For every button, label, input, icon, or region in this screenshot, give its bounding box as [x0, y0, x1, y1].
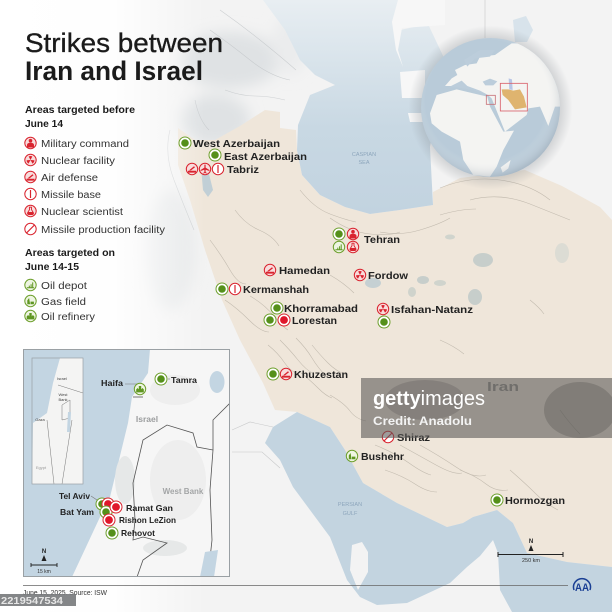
marker: Hamedan [264, 264, 330, 277]
legend item: military command: Military command [41, 139, 129, 150]
mini locator map [32, 358, 83, 484]
sea label: Caspian Sea [352, 152, 376, 166]
sea label: Caspian Sea: SEA [358, 160, 370, 166]
title: Strikes between [25, 28, 223, 58]
Iran highlight [502, 89, 527, 109]
legend item: oil depot: Oil depot [41, 281, 87, 292]
marker: Isfahan-Natanz: Isfahan-Natanz [391, 304, 473, 316]
inset scale bar: N [42, 549, 46, 555]
marker: Khuzestan: Khuzestan [294, 369, 348, 381]
marker: Kermanshah: Kermanshah [243, 284, 309, 296]
inset lake: Sea of Galilee [210, 371, 224, 393]
scale bar: main map: 250 km [522, 558, 540, 564]
sea label: Persian Gulf: GULF [343, 511, 358, 517]
inset scale bar [31, 549, 57, 575]
watermark band [361, 378, 612, 438]
legend item: nuclear scientist [25, 205, 123, 218]
legend item: gas field: Gas field [41, 297, 86, 308]
legend item: nuclear facility [25, 154, 115, 167]
source line: June 15, 2025. Source: ISW [23, 590, 107, 597]
globe land [430, 43, 567, 177]
mini map labels: Gaza [35, 417, 46, 422]
footer rule [23, 584, 568, 586]
legend heading: before June 14: Areas targeted before [25, 104, 135, 116]
inset marker: Rishon LeZion [103, 514, 176, 526]
water: Caspian Sea [263, 0, 445, 214]
inset label: West Bank: West Bank [163, 487, 204, 496]
legend item: air defense [25, 171, 98, 184]
inset borders [133, 397, 230, 577]
land: Iran [178, 110, 612, 567]
marker: Hormozgan: Hormozgan [505, 495, 565, 507]
mini map labels: Bank [58, 397, 68, 402]
marker: Bushehr [346, 450, 404, 463]
inset marker: Ramat Gan: Ramat Gan [126, 503, 173, 513]
inset marker: Bat Yam [60, 506, 112, 518]
legend heading: June 14-15: June 14-15 [25, 261, 79, 273]
sea label: Persian Gulf: PERSIAN [338, 502, 362, 508]
inset marker: Bat Yam: Bat Yam [60, 507, 94, 517]
marker: Khorramabad: Khorramabad [284, 303, 358, 315]
border lines: Iraq Kuwait [232, 0, 485, 468]
mini map labels: West [58, 392, 68, 397]
legend heading: June 14-15: Areas targeted on [25, 247, 115, 259]
legend item: missile production facility: Missile production facility [41, 225, 165, 236]
inset scale bar: 15 km [37, 569, 51, 575]
land: east Caspian shore [392, 0, 445, 122]
target box: Israel [486, 95, 495, 104]
inset terrain [115, 456, 187, 556]
logo: AA: AA [575, 582, 589, 594]
sea label: Persian Gulf [338, 502, 362, 517]
target box: Iran [500, 83, 527, 111]
white fade behind legend [0, 0, 205, 612]
legend heading: before June 14 [25, 104, 135, 130]
title [25, 28, 223, 86]
inset marker: Rishon LeZion: Rishon LeZion [119, 515, 176, 525]
legend heading: before June 14: June 14 [25, 118, 63, 130]
marker: East Azerbaijan: East Azerbaijan [224, 151, 307, 163]
mountain ridges [210, 179, 580, 510]
inset lake: Dead Sea [200, 550, 218, 577]
lakes [201, 167, 569, 305]
land: Qatar [350, 542, 368, 590]
marker: Shiraz [382, 431, 430, 444]
locator globe [408, 26, 572, 190]
legend item: missile base [25, 188, 101, 201]
marker: Fordow [354, 269, 409, 282]
marker: Tehran: Tehran [364, 234, 400, 246]
marker: Hamedan: Hamedan [279, 265, 330, 277]
terrain shading: Caucasus and Turkey [145, 15, 308, 310]
inset marker: Tel Aviv [59, 491, 108, 510]
marker: Tehran [333, 228, 400, 253]
water: Persian Gulf and Gulf of Oman [265, 412, 612, 612]
legend item: missile production facility [25, 223, 165, 236]
mini map labels [35, 376, 68, 470]
legend: areas targeted on June 14-15 [25, 247, 115, 323]
legend item: air defense: Air defense [41, 173, 98, 184]
inset marker: Tamra [155, 373, 197, 385]
marker: Lorestan: Lorestan [292, 315, 337, 327]
inset label: Israel: Israel [136, 414, 158, 424]
marker: Tabriz: Tabriz [227, 164, 259, 176]
mini map labels: Israel [57, 376, 67, 381]
legend heading: June 14-15 [25, 247, 115, 273]
legend: areas targeted before June 14 [25, 104, 165, 236]
inset marker: Tel Aviv red [102, 498, 114, 510]
marker: Bushehr: Bushehr [361, 451, 404, 463]
inset marker: Tel Aviv: Tel Aviv [59, 491, 90, 501]
legend item: nuclear scientist: Nuclear scientist [41, 207, 123, 218]
marker: Fordow: Fordow [368, 270, 409, 282]
marker: West Azerbaijan: West Azerbaijan [193, 138, 280, 150]
marker: Khuzestan [267, 368, 348, 381]
legend item: nuclear facility: Nuclear facility [41, 156, 115, 167]
inset marker: Ramat Gan [110, 501, 173, 513]
inset map: Israel [23, 349, 230, 577]
title: Iran and Israel [25, 56, 203, 86]
image id watermark: 2219547534 [1, 595, 63, 607]
inset marker: Tamra: Tamra [171, 375, 197, 385]
marker: Kermanshah [216, 283, 309, 296]
globe inland seas [483, 79, 497, 85]
logo: AA [574, 579, 590, 594]
legend item: missile base: Missile base [41, 190, 101, 201]
marker: Isfahan-Natanz [377, 303, 473, 328]
marker: Lorestan [264, 314, 337, 327]
inset sea [23, 349, 150, 577]
country label: Iran: Iran [487, 379, 519, 394]
lake: Aral [513, 16, 533, 42]
legend item: oil refinery: Oil refinery [41, 312, 95, 323]
sea label: Caspian Sea: CASPIAN [352, 152, 376, 158]
inset marker: Haifa: Haifa [101, 378, 123, 388]
marker: Shiraz: Shiraz [397, 432, 430, 444]
mini map labels: Egypt [36, 465, 47, 470]
scale bar: main map: N [529, 539, 533, 545]
legend item: military command [25, 137, 129, 150]
mountain ridges: Turkey and Caucasus [168, 10, 296, 230]
inset marker: Rehovot [106, 527, 155, 539]
inset marker: Rehovot: Rehovot [121, 528, 155, 538]
marker: East Azerbaijan [209, 149, 307, 163]
marker: Tabriz [186, 163, 259, 176]
watermark wordmark: gettyimages [373, 388, 485, 410]
scale bar: main map [498, 539, 563, 564]
watermark credit: Credit: Anadolu [373, 416, 472, 428]
inset marker: Haifa [101, 378, 146, 395]
